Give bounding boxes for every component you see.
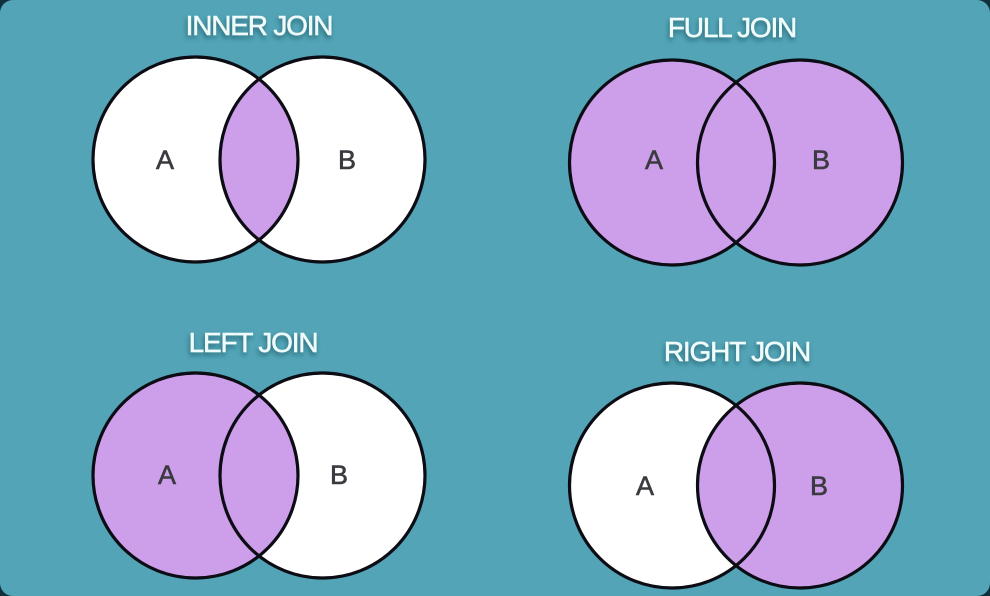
venn diagram: left join [93,373,425,578]
venn diagram: right join: A [636,471,654,501]
heading: full join: FULL JOIN [668,12,796,43]
heading: right join: RIGHT JOIN [664,336,810,367]
venn diagram: full join: B [812,145,830,175]
venn diagram: left join: A [158,460,176,490]
panel: full join [570,12,902,265]
panel: left join [93,327,425,578]
panel: inner join [93,10,425,262]
venn diagram: right join [570,383,902,588]
venn diagram: full join: A [645,145,663,175]
heading: left join: LEFT JOIN [189,327,317,358]
venn diagram: inner join [93,57,425,262]
heading: inner join: INNER JOIN [186,10,332,41]
panel: right join [570,336,902,588]
venn diagram: inner join: A [156,145,174,175]
venn diagram: inner join: B [338,145,356,175]
venn diagram: left join: B [330,460,348,490]
venn diagram: right join: B [810,471,828,501]
venn diagram: full join [570,60,902,265]
